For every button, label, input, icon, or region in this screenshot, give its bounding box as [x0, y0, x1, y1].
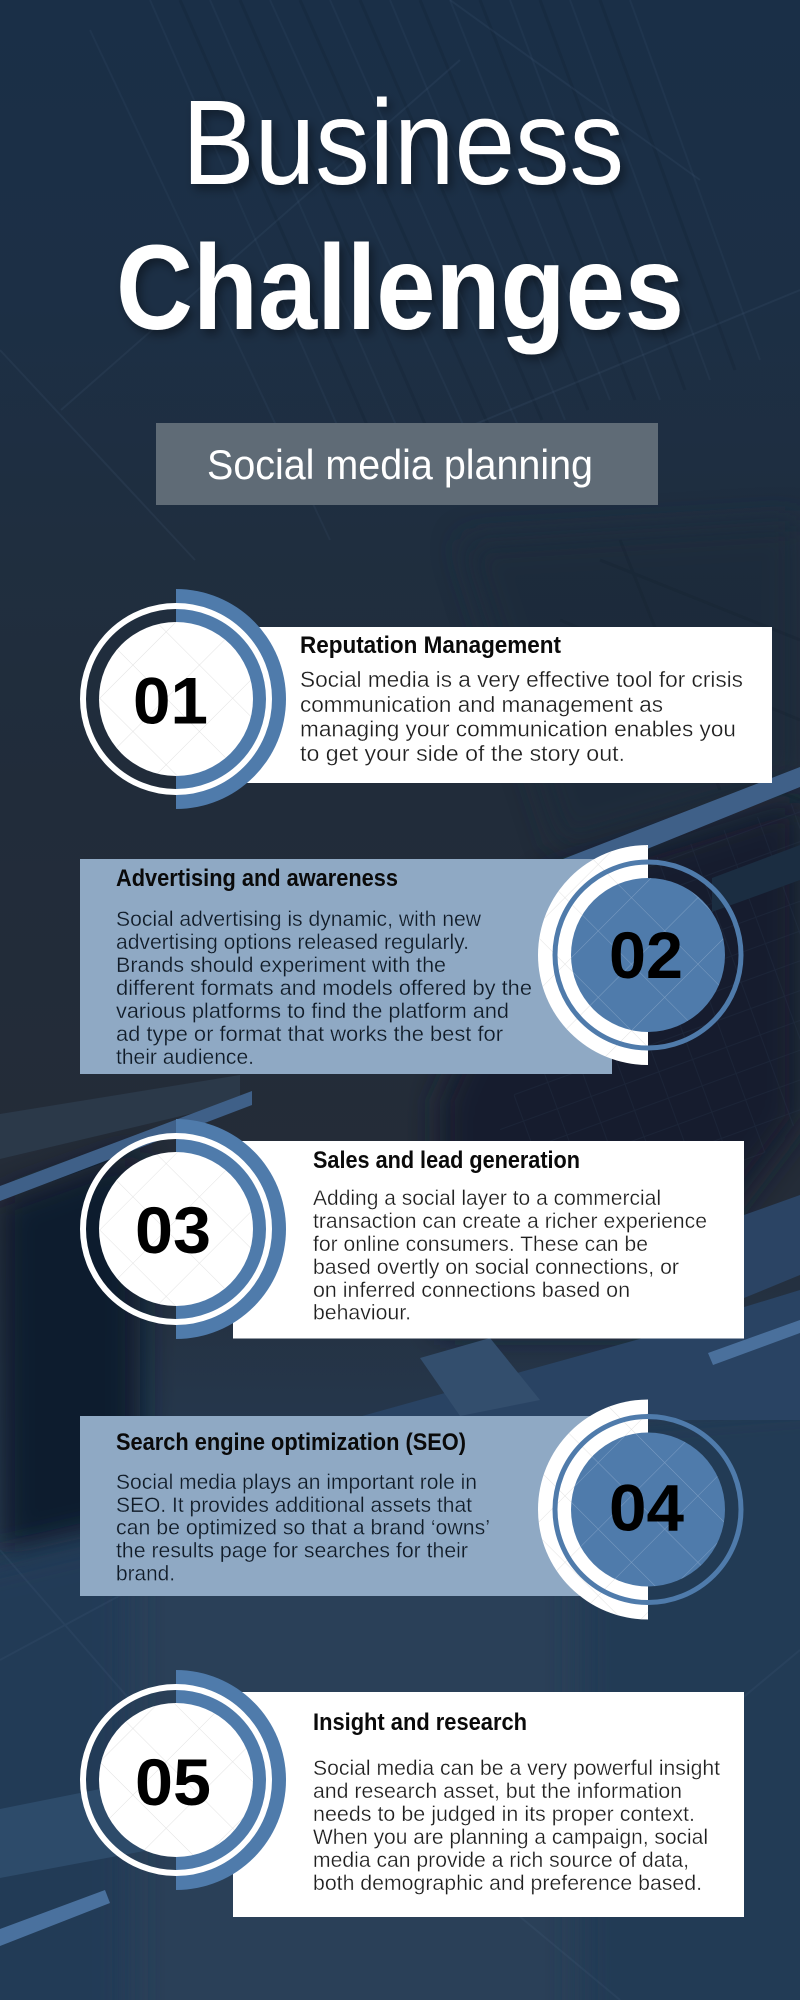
- wide translucent band, lower left: [0, 1761, 240, 1878]
- card: 03 text: Adding a social layer to a commercial: [313, 1186, 661, 1210]
- card: 02 text: [80, 859, 612, 1074]
- panel: 04 Search engine optimization: [80, 1400, 741, 1620]
- wide translucent band, middle left: [0, 1075, 240, 1159]
- card: 01 text: Reputation Management: [300, 632, 561, 659]
- card: 05 text: Insight and research: [313, 1709, 527, 1736]
- card: 04 text: brand.: [116, 1562, 175, 1586]
- thin band: right: [708, 1320, 800, 1365]
- card: 02 text: various platforms to find the platform and: [116, 999, 509, 1023]
- badge: number 03: 03: [135, 1193, 211, 1267]
- title: Business Challenges: Business: [182, 74, 624, 210]
- badge: number 02: 02: [609, 918, 683, 992]
- card: 03 text: behaviour.: [313, 1300, 411, 1324]
- wide band: between 03 and 04: [362, 1290, 800, 1420]
- card: 05 text: [233, 1692, 744, 1917]
- card: 02 text: Social advertising is dynamic, with new: [116, 907, 481, 931]
- title: Business Challenges: [116, 74, 684, 355]
- badge: number 01: [83, 589, 286, 809]
- card: 02 text: Brands should experiment with the: [116, 953, 446, 977]
- subtitle banner: Social media planning: Social media planning: [207, 441, 593, 488]
- panel: 02 Advertising and awareness: [80, 845, 741, 1074]
- card: 02 text: their audience.: [116, 1045, 254, 1069]
- card: 01 text: communication and management as: [300, 692, 663, 717]
- card: 05 text: both demographic and preference based.: [313, 1871, 702, 1895]
- card: 03 text: for online consumers. These can be: [313, 1232, 648, 1256]
- card: 03 text: on inferred connections based on: [313, 1278, 630, 1302]
- faint band below 02: [712, 845, 800, 912]
- card: 04 text: the results page for searches for their: [116, 1538, 468, 1562]
- card: 05 text: and research asset, but the information: [313, 1779, 682, 1803]
- card: 04 text: Search engine optimization (SEO): [116, 1429, 466, 1456]
- card: 05 text: Social media can be a very powerful insight: [313, 1756, 720, 1780]
- card: 01 text: managing your communication enables you: [300, 716, 736, 742]
- card: 04 text: [80, 1416, 612, 1596]
- panel: 01 Reputation Management: [83, 589, 772, 809]
- card: 04 text: SEO. It provides additional assets that: [116, 1493, 472, 1517]
- thin band: middle left: [0, 1091, 252, 1201]
- thin band: upper right: [563, 767, 800, 868]
- card: 02 text: advertising options released regularly.: [116, 930, 469, 954]
- card: 03 text: transaction can create a richer experience: [313, 1209, 707, 1233]
- badge: number 04: [538, 1400, 741, 1620]
- subtitle banner: Social media planning: [156, 423, 658, 505]
- card: 03 text: Sales and lead generation: [313, 1147, 580, 1174]
- card: 04 text: Social media plays an important role in: [116, 1470, 477, 1494]
- badge: number 04: 04: [609, 1470, 684, 1544]
- badge: number 05: [83, 1670, 286, 1890]
- card: 05 text: needs to be judged in its proper context.: [313, 1802, 695, 1826]
- card: 02 text: different formats and models offered by the: [116, 976, 532, 1000]
- card: 04 text: can be optimized so that a brand ‘owns’: [116, 1516, 490, 1540]
- card: 05 text: When you are planning a campaign, social: [313, 1825, 708, 1849]
- badge: number 02: [538, 845, 741, 1065]
- badge: number 01: 01: [133, 664, 208, 738]
- card: 03 text: [233, 1141, 744, 1338]
- card: 01 text: [240, 627, 772, 783]
- card: 03 text: based overtly on social connections, or: [313, 1255, 679, 1279]
- panel: 05 Insight and research: [83, 1670, 744, 1917]
- badge: number 05: 05: [135, 1745, 211, 1819]
- card: 01 text: to get your side of the story out.: [300, 741, 625, 766]
- panel: 03 Sales and lead generation: [83, 1119, 744, 1339]
- title: Business Challenges: Challenges: [116, 219, 684, 355]
- thin band: lower left: [0, 1890, 110, 1946]
- card: 01 text: Social media is a very effective tool for crisis: [300, 667, 743, 692]
- card: 02 text: Advertising and awareness: [116, 865, 398, 892]
- badge: number 03: [83, 1119, 286, 1339]
- card: 05 text: media can provide a rich source of data,: [313, 1848, 689, 1872]
- card: 02 text: ad type or format that works the best for: [116, 1022, 503, 1046]
